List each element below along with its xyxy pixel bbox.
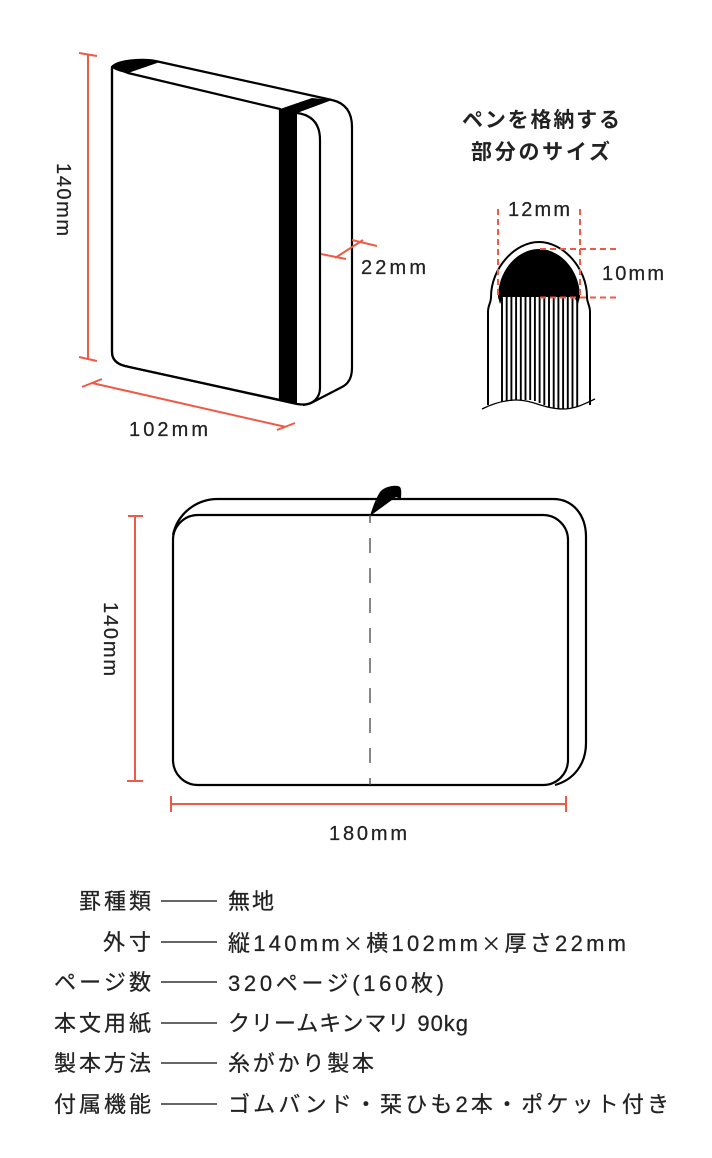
wavy cut line [482, 399, 595, 409]
label: 140mm: 140mm [99, 602, 121, 676]
diagram: closed notebook [52, 53, 426, 441]
label: 22mm: 22mm [361, 257, 426, 279]
label: 12mm: 12mm [508, 199, 570, 221]
page edge stripes [502, 297, 577, 409]
heading: pen storage size [462, 109, 620, 164]
label: 10mm: 10mm [602, 263, 664, 285]
notebook outline [112, 60, 352, 405]
heading: pen storage size: 部分のサイズ [471, 140, 610, 164]
pen loop outline [488, 242, 590, 405]
row: features: ゴムバンド・栞ひも2本・ポケット付き [228, 1092, 669, 1117]
elastic band [280, 98, 332, 404]
front spread [173, 515, 568, 785]
label: 140mm: 140mm [52, 163, 74, 236]
row: outer dimensions: 外寸 [103, 930, 151, 955]
row: paper [54, 1011, 468, 1036]
row: page count [54, 970, 444, 996]
back cover outline [173, 499, 586, 785]
row: page count: ページ数 [54, 970, 151, 995]
row: ruling: 罫種類 [79, 889, 151, 914]
dimension: height 140mm [127, 516, 143, 781]
label: 180mm: 180mm [329, 823, 407, 845]
heading: pen storage size: ペンを格納する [462, 109, 620, 132]
pen loop black opening [498, 249, 580, 304]
dashed dimension guides [498, 209, 620, 298]
label: 102mm: 102mm [129, 419, 208, 441]
row: features: 付属機能 [54, 1092, 151, 1117]
spine band end [112, 60, 160, 73]
specification table [54, 889, 669, 1117]
row: ruling [79, 889, 274, 914]
diagram: open notebook [99, 486, 586, 845]
row: binding: 製本方法 [54, 1051, 151, 1076]
centre fold dashed line [369, 515, 371, 785]
row: ruling: 無地 [228, 889, 274, 914]
ribbon marker [370, 486, 401, 516]
dimension: width 102mm [82, 379, 295, 430]
row: outer dimensions: 縦140mm×横102mm×厚さ22mm [228, 928, 626, 957]
row: page count: 320ページ(160枚) [228, 971, 444, 996]
row: binding [54, 1051, 374, 1076]
diagram: pen holder [462, 109, 664, 409]
dimension: height 140mm [79, 53, 97, 361]
row: paper: 本文用紙 [54, 1011, 151, 1036]
row: binding: 糸がかり製本 [228, 1051, 374, 1076]
dimension: width 180mm [171, 796, 566, 812]
dimension: thickness 22mm [321, 240, 377, 259]
row: paper: クリームキンマリ 90kg [228, 1011, 468, 1036]
